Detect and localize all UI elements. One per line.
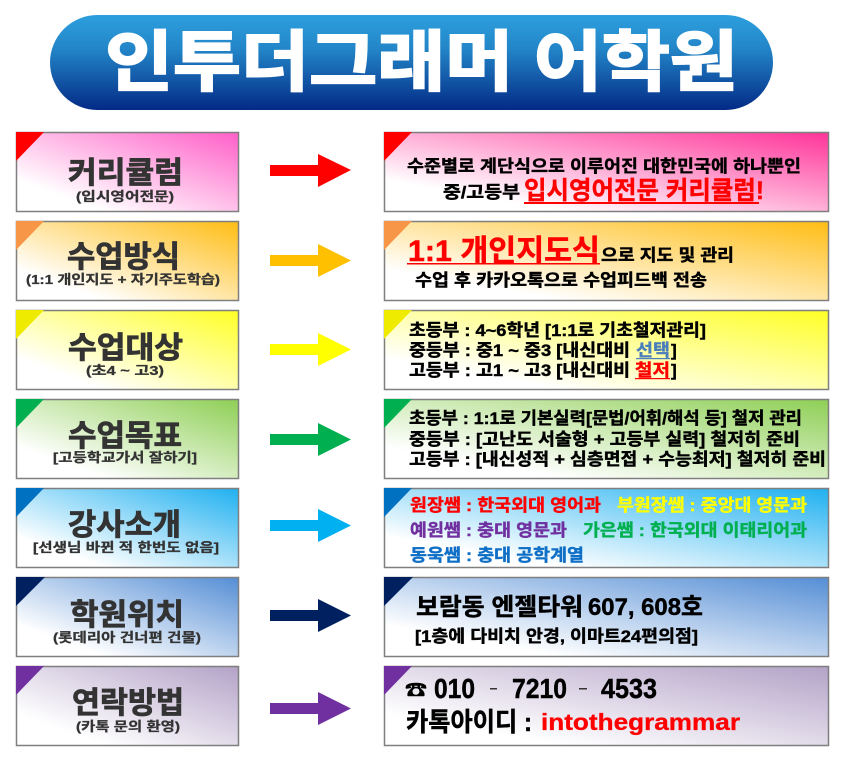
panel: method detail: 수업 후 카카오톡으로 수업피드백 전송 <box>415 271 707 290</box>
panel: target detail: 고등부 : 고1 ~ 고3 [내신대비 <box>409 361 630 380</box>
row: location <box>16 577 828 656</box>
panel: target detail: 철저 <box>635 361 670 380</box>
panel: contact label: 연락방법 <box>72 687 184 720</box>
title banner <box>50 15 773 110</box>
panel: instructors detail <box>384 488 828 568</box>
arrow: purple <box>270 692 351 725</box>
panel: location label <box>16 577 238 656</box>
panel: target label: 수업대상 <box>68 332 183 365</box>
panel: instructors detail: 동욱쌤 : 충대 공학계열 <box>410 546 584 565</box>
panel: instructors detail: 부원장쌤 : 중앙대 영문과 <box>617 496 807 515</box>
title banner: 인투더그래머 어학원 <box>105 25 738 99</box>
row: teaching method <box>16 221 828 300</box>
row: target students <box>16 310 828 390</box>
panel: target label <box>16 310 238 390</box>
arrow: red <box>270 154 351 187</box>
panel: method label: 수업방식 <box>67 241 180 274</box>
panel: instructors detail: 원장쌤 : 한국외대 영어과 <box>410 496 601 515</box>
panel: target detail <box>384 310 828 390</box>
panel: target detail: 중등부 : 중1 ~ 중3 [내신대비 <box>409 341 630 360</box>
panel: instructors label <box>16 488 238 568</box>
arrow: navy <box>270 599 351 632</box>
panel: curriculum label <box>16 132 238 212</box>
panel: goals detail: 초등부 : 1:1로 기본실력[문법/어휘/해석 등] 철저 관리 <box>409 409 802 428</box>
panel: instructors label: 강사소개 <box>68 509 181 542</box>
panel: curriculum detail: 중/고등부 <box>443 183 520 202</box>
arrow: sky blue <box>270 509 351 542</box>
panel: location detail: 607, 608호 <box>588 594 703 621</box>
panel: location label: (롯데리아 건너편 건물) <box>53 630 201 645</box>
row: goals <box>16 399 828 478</box>
panel: location label: 학원위치 <box>70 599 184 632</box>
panel: contact detail: intothegrammar <box>541 709 740 735</box>
panel: contact label <box>16 666 238 746</box>
panel: instructors label: [선생님 바뀐 적 한번도 없음] <box>33 540 219 555</box>
panel: curriculum detail: 수준별로 계단식으로 이루어진 대한민국에 하나뿐인 <box>407 157 801 176</box>
panel: contact detail: 7210 <box>512 673 567 704</box>
panel: target detail: 선택 <box>636 341 670 360</box>
arrow: orange <box>270 244 351 277</box>
panel: method detail: 1:1 개인지도식 <box>408 235 600 268</box>
panel: goals detail: 중등부 : [고난도 서술형 + 고등부 실력] 철저히 준비 <box>409 430 800 449</box>
panel: curriculum label: (입시영어전문) <box>76 189 174 204</box>
panel: location detail: [1층에 다비치 안경, 이마트24편의점] <box>415 627 698 646</box>
row: instructors <box>16 488 828 568</box>
panel: contact detail: 010 <box>434 673 475 704</box>
panel: contact label: (카톡 문의 환영) <box>76 719 180 734</box>
panel: instructors detail: 가은쌤 : 한국외대 이태리어과 <box>583 521 807 540</box>
panel: contact detail: 카톡아이디 : <box>406 707 532 737</box>
panel: contact detail: ☎ <box>405 680 427 701</box>
arrow: yellow <box>270 333 351 366</box>
panel: curriculum detail <box>384 132 828 212</box>
panel: goals label <box>16 399 238 478</box>
row: curriculum <box>16 132 828 212</box>
panel: method label: (1:1 개인지도 + 자기주도학습) <box>26 272 220 287</box>
panel: target detail: ] <box>671 361 677 380</box>
panel: method detail <box>384 221 828 300</box>
panel: target detail: ] <box>671 341 677 360</box>
panel: method label <box>16 221 238 300</box>
arrow: green <box>270 423 351 456</box>
panel: contact detail <box>384 666 828 746</box>
panel: instructors detail: 예원쌤 : 충대 영문과 <box>410 521 567 540</box>
panel: goals detail <box>384 399 828 478</box>
panel: target detail: 초등부 : 4~6학년 [1:1로 기초철저관리] <box>409 321 706 340</box>
panel: target label: (초4 ~ 고3) <box>86 363 164 378</box>
panel: curriculum label: 커리큘럼 <box>68 157 183 190</box>
panel: goals label: [고등학교가서 잘하기] <box>53 450 197 465</box>
panel: goals detail: 고등부 : [내신성적 + 심층면접 + 수능최저] 철저히 준비 <box>409 450 826 469</box>
panel: location detail <box>384 577 828 656</box>
panel: contact detail: 4533 <box>601 673 657 704</box>
panel: location detail: 보람동 엔젤타워 <box>416 594 583 621</box>
row: contact <box>16 666 828 746</box>
panel: curriculum detail: 입시영어전문 커리큘럼! <box>524 177 764 205</box>
panel: method detail: 으로 지도 및 관리 <box>601 246 734 265</box>
panel: goals label: 수업목표 <box>68 420 182 453</box>
